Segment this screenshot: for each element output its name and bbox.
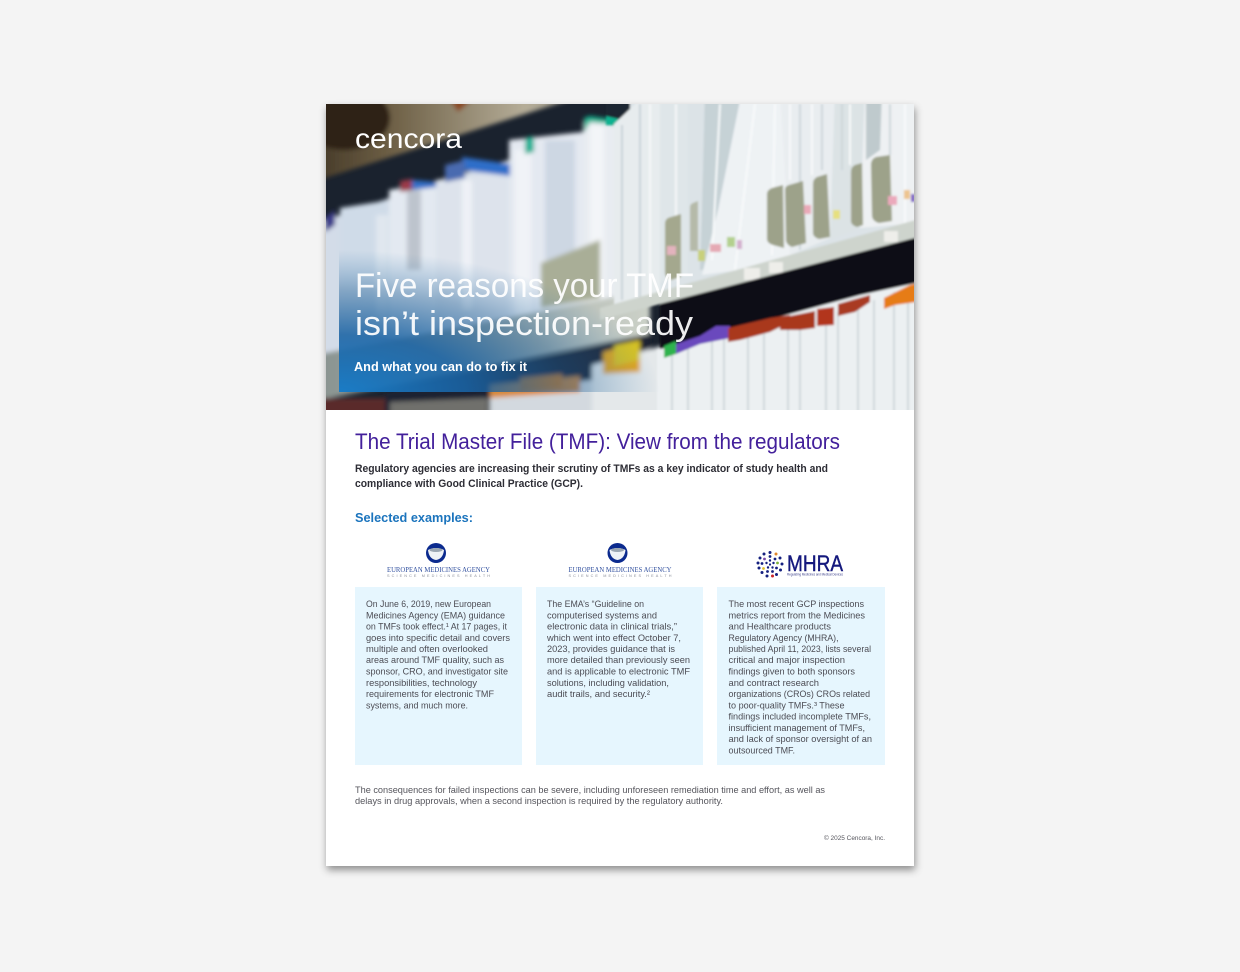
- intro paragraph: compliance with Good Clinical Practice (GCP).: [355, 478, 583, 490]
- panel text: systems, and much more.: [366, 699, 468, 710]
- panel text: solutions, including validation,: [547, 677, 669, 688]
- document page card: [300, 86, 930, 866]
- selected examples heading: Selected examples:: [355, 510, 473, 525]
- panel text: and is applicable to electronic TMF: [547, 666, 690, 676]
- closing paragraph: delays in drug approvals, when a second inspection is required by the regulatory authority.: [355, 795, 723, 806]
- panel text: to poor-quality TMFs.³ These: [728, 699, 844, 710]
- panel text: Medicines Agency (EMA) guidance: [366, 609, 505, 620]
- panel text: sponsor, CRO, and investigator site: [366, 666, 508, 676]
- hero banner photo of file shelves: [326, 104, 914, 410]
- panel text: and Healthcare products: [728, 621, 831, 632]
- section heading: The Trial Master File (TMF): View from the regulators: [355, 429, 840, 454]
- hero subtitle: And what you can do to fix it: [354, 359, 528, 374]
- icon: MHRA dot cluster: [756, 551, 784, 578]
- intro paragraph: Regulatory agencies are increasing their scrutiny of TMFs as a key indicator of study health and: [355, 463, 828, 475]
- panel text: findings included incomplete TMFs,: [728, 710, 871, 722]
- panel text: findings given to both sponsors: [728, 666, 855, 676]
- wordmark: MHRA: MHRA: [787, 551, 843, 576]
- hero title: isn’t inspection-ready: [355, 305, 693, 343]
- panel text: On June 6, 2019, new European: [366, 598, 491, 609]
- panel text: The EMA’s “Guideline on: [547, 598, 644, 609]
- panel text: and lack of sponsor oversight of an: [728, 733, 872, 744]
- panel text: more detailed than previously seen: [547, 654, 690, 665]
- blue gradient overlay panel: [339, 250, 659, 392]
- logo: MHRA: [756, 551, 843, 578]
- logo: European Medicines Agency, column 2: EUROPEAN MEDICINES AGENCY: [568, 565, 672, 574]
- MHRA tagline: Regulating Medicines and Medical Devices: [787, 572, 843, 576]
- panel: EMA guidance on TMFs: [355, 587, 522, 765]
- panel text: critical and major inspection: [728, 654, 845, 665]
- hero title: [355, 267, 694, 343]
- panel text: published April 11, 2023, lists several: [728, 643, 871, 654]
- panel text: insufficient management of TMFs,: [728, 722, 865, 733]
- panel text: metrics report from the Medicines: [728, 609, 865, 620]
- panel text: audit trails, and security.²: [547, 688, 650, 699]
- panel text: [546, 598, 690, 699]
- panel: EMA computerised systems guideline: [536, 587, 703, 765]
- panel text: electronic data in clinical trials,”: [547, 621, 677, 632]
- panel text: and contract research: [728, 677, 819, 688]
- panel: MHRA inspection metrics: [717, 587, 885, 765]
- logo: European Medicines Agency, column 2: [568, 543, 672, 578]
- panel text: The most recent GCP inspections: [728, 598, 864, 609]
- logo: European Medicines Agency, column 2: SCIENCE MEDICINES HEALTH: [568, 574, 672, 578]
- closing paragraph: The consequences for failed inspections can be severe, including unforeseen remediation time and effort, as well as: [355, 784, 825, 795]
- hero title: Five reasons your TMF: [355, 267, 694, 305]
- closing paragraph: [355, 784, 825, 806]
- panel text: Regulatory Agency (MHRA),: [728, 632, 838, 643]
- panel text: responsibilities, technology: [366, 677, 477, 688]
- panel text: outsourced TMF.: [728, 744, 795, 755]
- panel text: [728, 598, 872, 755]
- logo: European Medicines Agency, column 1: [387, 543, 490, 578]
- panel text: areas around TMF quality, such as: [366, 654, 504, 665]
- panel text: which went into effect October 7,: [546, 632, 681, 643]
- panel text: [366, 598, 510, 710]
- copyright: © 2025 Cencora, Inc.: [824, 835, 885, 842]
- panel text: organizations (CROs) CROs related: [728, 688, 870, 699]
- intro paragraph: [355, 463, 828, 490]
- panel text: on TMFs took effect.¹ At 17 pages, it: [366, 621, 507, 632]
- panel text: 2023, provides guidance that is: [547, 643, 675, 654]
- panel text: requirements for electronic TMF: [366, 688, 494, 699]
- logo: cencora: cencora: [355, 123, 462, 154]
- panel text: computerised systems and: [547, 609, 657, 620]
- panel text: goes into specific detail and covers: [366, 632, 510, 643]
- logo: European Medicines Agency, column 1: EUROPEAN MEDICINES AGENCY: [387, 565, 490, 574]
- logo: European Medicines Agency, column 1: SCIENCE MEDICINES HEALTH: [387, 574, 490, 578]
- panel text: multiple and often overlooked: [366, 643, 488, 654]
